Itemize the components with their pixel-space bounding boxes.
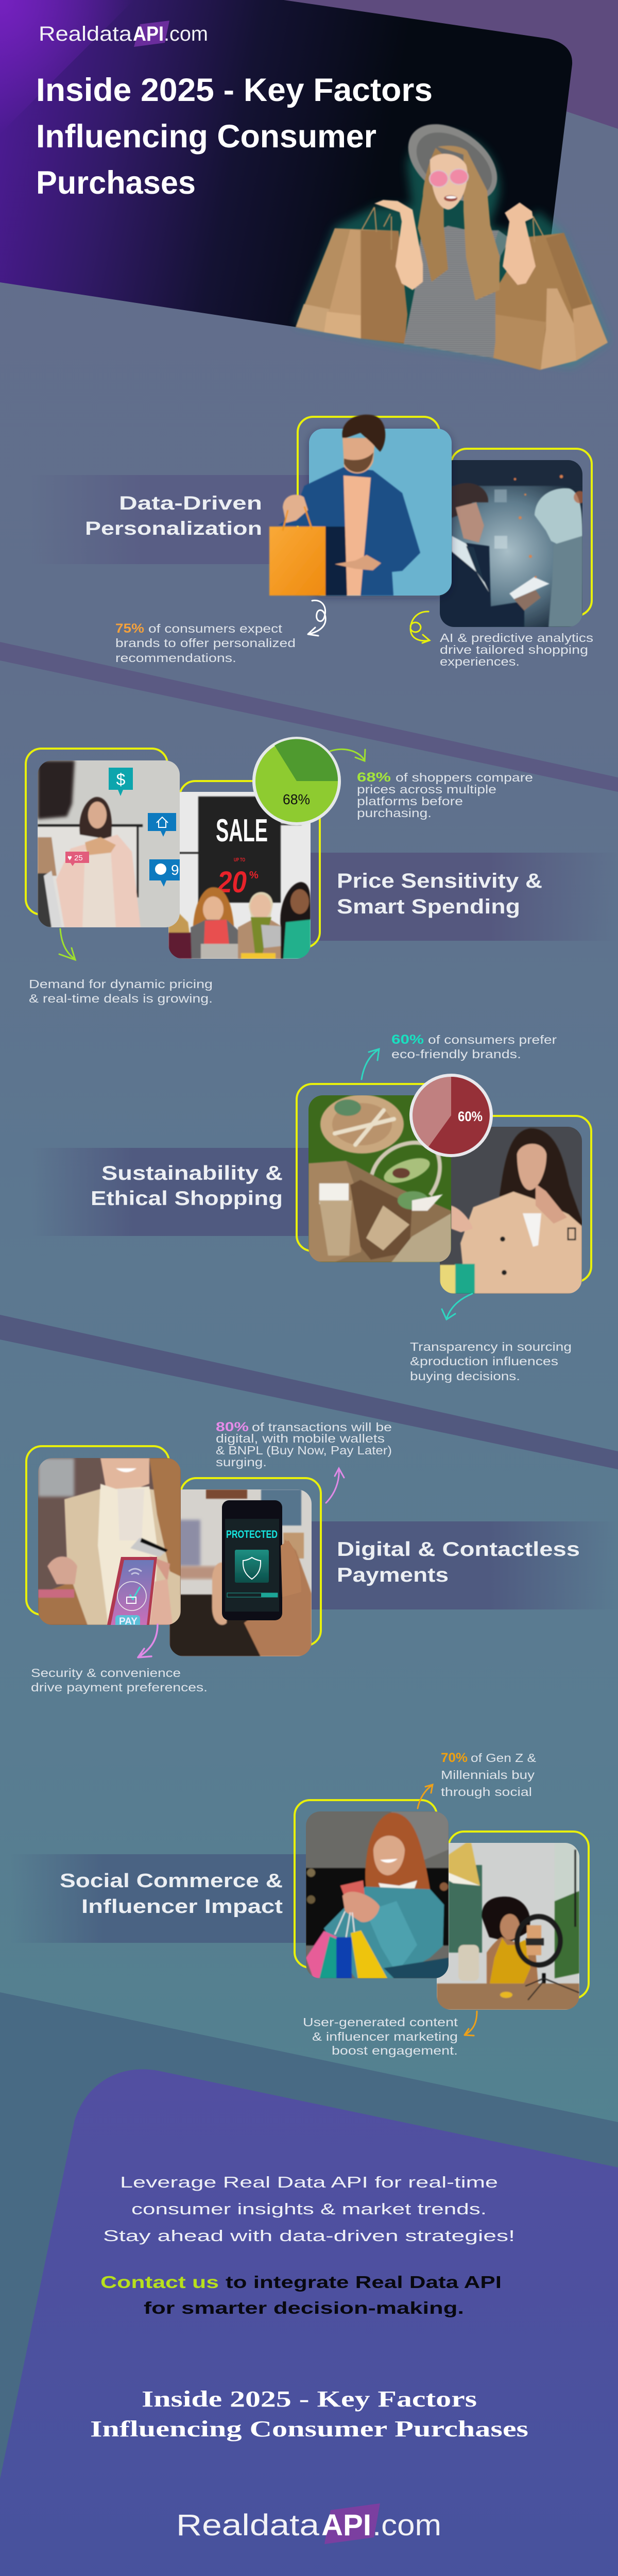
- icon: comment tag: [149, 859, 180, 887]
- stat: 68%: of shoppers compare: [396, 771, 533, 784]
- contact text: for smarter decision-making.: [144, 2298, 464, 2317]
- frame: phone shopper: [295, 1800, 437, 1968]
- icon: comment tag: 9: [171, 862, 179, 878]
- pie chart: 60%: 60%: [458, 1109, 483, 1124]
- icon: house tag: [148, 813, 176, 837]
- frame: protected phone: [181, 1478, 321, 1646]
- stat: 75%: 75%: [115, 621, 144, 636]
- note: user-generated content: [303, 2015, 458, 2057]
- logo: footer: API: [321, 2509, 371, 2542]
- poster text: %: [249, 870, 259, 881]
- heading: Data-Driven: [119, 493, 262, 514]
- stat: 75%: of consumers expect: [148, 622, 283, 635]
- logo: footer: [176, 2503, 441, 2544]
- stat: 80%: [216, 1420, 392, 1469]
- icon: dollar tag: $: [116, 770, 126, 789]
- photo: eco tableware on moss: [308, 1095, 451, 1262]
- stat: 60%: [391, 1032, 557, 1061]
- heading: Digital & Contactless: [337, 1538, 580, 1561]
- photo: creator with ring light: [437, 1843, 579, 2010]
- photo: man with orange bag: [269, 415, 452, 596]
- footer panel: [0, 2069, 618, 2576]
- stat: 75%: brands to offer personalized: [115, 636, 296, 650]
- note: AI analytics: [440, 631, 593, 668]
- stat: 70%: through social: [441, 1785, 532, 1799]
- contact text: to integrate Real Data API: [226, 2273, 502, 2292]
- stat: 68%: [357, 770, 533, 820]
- footer title: [90, 2386, 528, 2442]
- call to action text: Leverage Real Data API for real-time: [120, 2173, 498, 2191]
- payment phone: PAY: [119, 1616, 138, 1627]
- stat: 70%: 70%: [441, 1751, 468, 1765]
- contact text: Contact us: [100, 2273, 219, 2292]
- heading: Ethical Shopping: [91, 1188, 283, 1210]
- top right purple band: [284, 0, 618, 129]
- stat: 68%: purchasing.: [357, 806, 432, 820]
- pie chart: 68%: 68%: [283, 791, 310, 807]
- heading: Social Commerce &: [60, 1870, 283, 1892]
- poster text: [216, 819, 267, 892]
- note: security: drive payment preferences.: [31, 1681, 208, 1694]
- hero woman with shopping bags: [296, 108, 608, 370]
- stat: 75%: recommendations.: [115, 651, 236, 665]
- heading: Influencer Impact: [81, 1896, 283, 1918]
- stat: 60%: of consumers prefer: [428, 1033, 557, 1046]
- photo: man and robot: [440, 460, 586, 627]
- footer wedge: [0, 1992, 618, 2576]
- poster text: UP TO: [234, 857, 245, 863]
- stat: 75%: [115, 621, 296, 665]
- title: [36, 72, 433, 201]
- section 4: digital payments: [26, 1420, 618, 1694]
- arrow: pink down: [138, 1624, 158, 1657]
- icon: dollar tag: [109, 768, 133, 796]
- title: Inside 2025 - Key Factors: [36, 72, 433, 108]
- call to action text: Stay ahead with data-driven strategies!: [103, 2227, 515, 2245]
- frame: creator photo: [449, 1832, 589, 1998]
- arrow: green right: [330, 749, 365, 761]
- note: user-generated content: User-generated content: [303, 2015, 458, 2029]
- photo: hand with protected phone: [169, 1489, 312, 1656]
- stat: 80%: surging.: [216, 1455, 267, 1469]
- note: dynamic pricing: & real-time deals is growing.: [29, 992, 213, 1005]
- section 2: price sensitivity: [26, 738, 618, 1005]
- heading: [337, 1538, 580, 1586]
- note: transparency: [410, 1340, 572, 1383]
- frame: AI photo: [451, 449, 592, 616]
- photo: sale poster and four shoppers: [168, 792, 311, 959]
- heading: Payments: [337, 1564, 449, 1586]
- heading: Personalization: [85, 518, 262, 539]
- stat: 60%: 60%: [391, 1032, 424, 1047]
- stat: 70%: Millennials buy: [441, 1768, 535, 1782]
- section 3: sustainability: [31, 1032, 591, 1383]
- pie chart: 68%: [254, 738, 339, 824]
- call to action text: [103, 2173, 515, 2245]
- arrow: teal down: [442, 1294, 472, 1319]
- section 5: social commerce: [10, 1751, 589, 2057]
- logo: footer: Realdata: [176, 2509, 320, 2542]
- photo: woman paying by phone: [38, 1458, 181, 1631]
- footer title: Influencing Consumer Purchases: [90, 2416, 528, 2442]
- heading band: [309, 853, 618, 941]
- section 1: data-driven personalization: [31, 415, 593, 668]
- heading: Smart Spending: [337, 895, 520, 918]
- heading: [91, 1162, 283, 1210]
- diagonal band one: [0, 642, 618, 792]
- photo: red-haired woman with phone and bags: [306, 1811, 449, 1978]
- stat: 68%: 68%: [357, 770, 391, 785]
- logo: header: .com: [164, 23, 208, 45]
- heading: [337, 870, 542, 918]
- arrow: white: [308, 600, 325, 636]
- arrow: yellow: [410, 612, 430, 643]
- note: transparency: buying decisions.: [410, 1369, 520, 1383]
- heading: Price Sensitivity &: [337, 870, 542, 892]
- stat: 80%: 80%: [216, 1420, 249, 1434]
- arrow: pink up: [326, 1468, 344, 1503]
- arrow: orange up: [418, 1785, 433, 1808]
- note: AI analytics: AI & predictive analytics: [440, 631, 593, 645]
- heading band: [31, 1148, 319, 1236]
- title: Influencing Consumer: [36, 118, 376, 155]
- stat: 70%: [441, 1751, 536, 1799]
- photo: woman with clothes and social icons: [38, 760, 180, 927]
- logo: header: API: [133, 23, 164, 45]
- frame: pay photo: [26, 1446, 169, 1615]
- stat: 68%: platforms before: [357, 794, 463, 808]
- payment phone: [107, 1557, 157, 1631]
- phone with protected screen: PROTECTED: [226, 1529, 278, 1540]
- poster text: SALE: [216, 813, 268, 849]
- logo: footer: .com: [372, 2509, 441, 2542]
- note: security: Security & convenience: [31, 1666, 181, 1680]
- note: transparency: &production influences: [410, 1354, 558, 1368]
- stat: 80%: digital, with mobile wallets: [216, 1432, 385, 1445]
- icon: heart tag: ♥ 25: [67, 854, 83, 862]
- icon: heart tag: [65, 852, 89, 866]
- hero panel: [0, 0, 608, 370]
- note: dynamic pricing: Demand for dynamic pricing: [29, 977, 213, 991]
- heading band: [10, 1854, 314, 1943]
- note: user-generated content: & influencer marketing: [312, 2030, 458, 2043]
- diagonal band two: [0, 1315, 618, 1469]
- heading: [85, 493, 262, 539]
- footer title: Inside 2025 - Key Factors: [142, 2386, 477, 2412]
- stat: 68%: prices across multiple: [357, 783, 496, 796]
- title: Purchases: [36, 165, 196, 201]
- note: dynamic pricing: [29, 977, 213, 1005]
- logo: header: Realdata: [39, 23, 132, 45]
- pie chart: 60%: [411, 1075, 491, 1156]
- note: user-generated content: boost engagement.: [332, 2044, 458, 2057]
- arrow: orange down: [465, 2011, 477, 2036]
- four shoppers: [168, 882, 311, 959]
- phone with protected screen: [222, 1500, 282, 1620]
- note: AI analytics: experiences.: [440, 655, 520, 668]
- arrow: green down: [59, 929, 75, 960]
- poster text: 20: [217, 866, 247, 899]
- stat: 80%: of transactions will be: [252, 1420, 392, 1434]
- heading: Sustainability &: [101, 1162, 283, 1184]
- frame: sale photo: [180, 781, 320, 947]
- note: AI analytics: drive tailored shopping: [440, 643, 588, 656]
- photo: woman in beige coat: [440, 1127, 582, 1294]
- stat: 60%: eco-friendly brands.: [391, 1047, 521, 1061]
- note: security: [31, 1666, 208, 1694]
- stat: 80%: & BNPL (Buy Now, Pay Later): [216, 1444, 392, 1457]
- frame: coat photo: [443, 1116, 591, 1282]
- frame: shop photo: [26, 749, 167, 914]
- stat: 70%: of Gen Z &: [471, 1751, 536, 1765]
- frame: eco photo: [297, 1084, 446, 1251]
- arrow: teal up: [362, 1049, 379, 1079]
- contact text: [100, 2273, 502, 2317]
- call to action text: consumer insights & market trends.: [131, 2200, 487, 2218]
- note: transparency: Transparency in sourcing: [410, 1340, 572, 1353]
- heading band: [31, 475, 319, 564]
- frame: shopper photo: [298, 417, 439, 582]
- heading band: [309, 1521, 618, 1609]
- heading: [60, 1870, 283, 1918]
- logo: header: [39, 21, 208, 47]
